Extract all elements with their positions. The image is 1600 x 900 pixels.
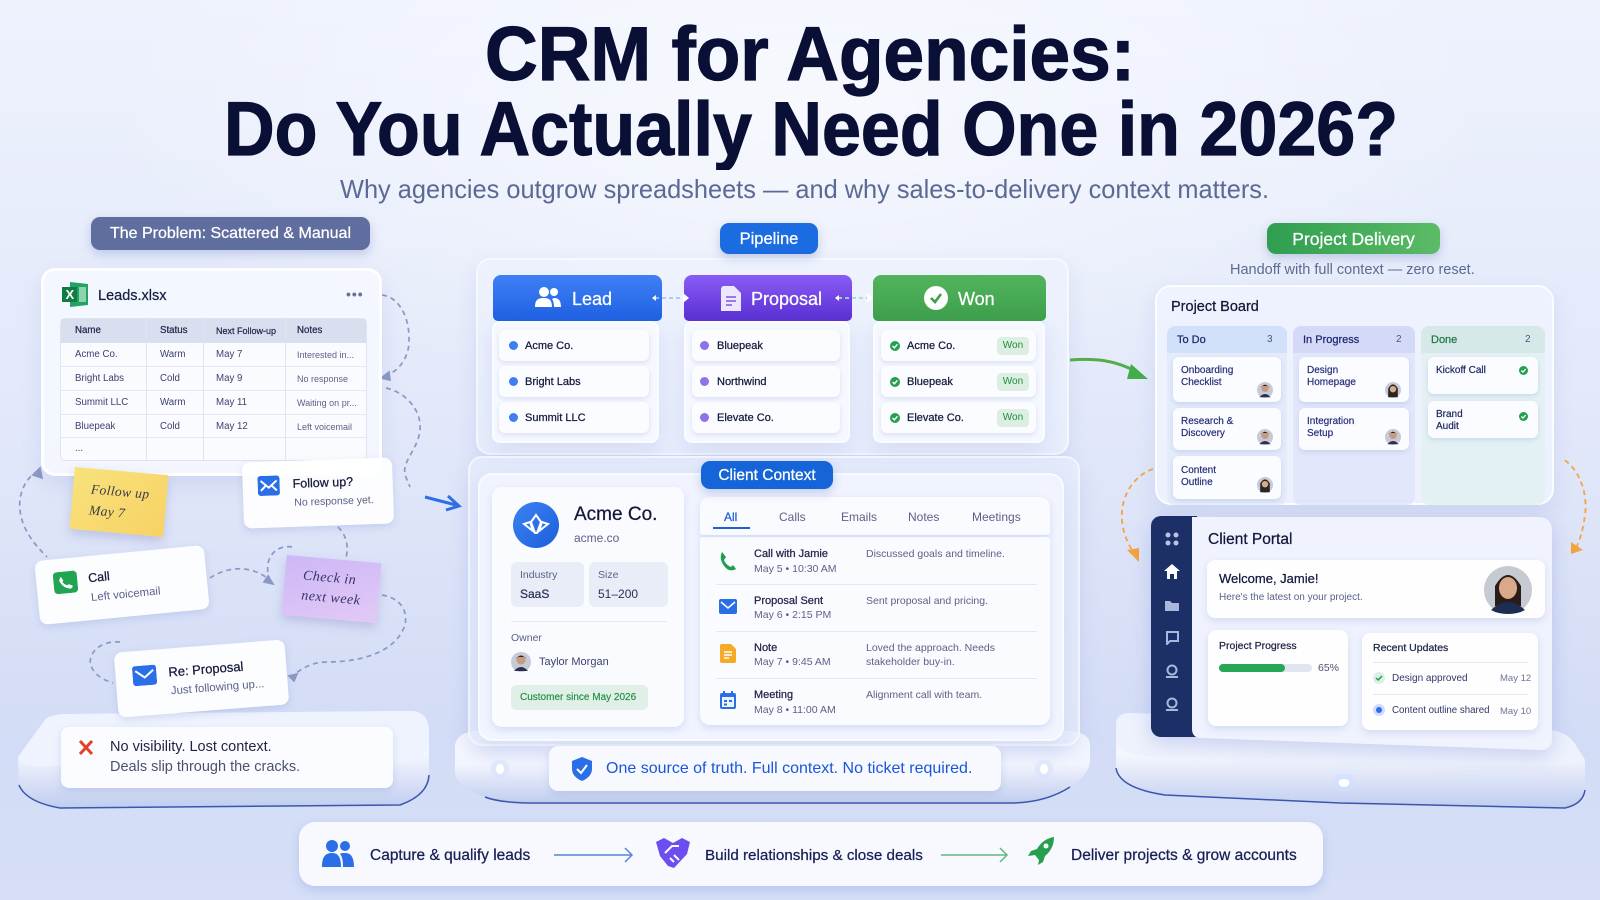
column: done bbox=[1421, 326, 1545, 505]
icon: note bbox=[720, 644, 736, 663]
card: integration: Integration bbox=[1307, 416, 1354, 427]
column: won: Won bbox=[1003, 376, 1023, 387]
leads table: ... bbox=[75, 443, 83, 454]
leads table bbox=[60, 318, 367, 461]
arrow: green bbox=[941, 848, 1008, 862]
badge: project delivery: Project Delivery bbox=[1292, 229, 1415, 249]
panel: project board bbox=[1155, 285, 1554, 505]
card: brand audit: Audit bbox=[1436, 421, 1459, 432]
header: in progress: In Progress bbox=[1303, 334, 1359, 346]
header: done: Done bbox=[1431, 334, 1457, 346]
activity timeline: Discussed goals and timeline. bbox=[866, 548, 1005, 560]
center platform base bbox=[455, 732, 1090, 804]
arrows: stage connectors bbox=[652, 293, 872, 303]
card: follow up email: Follow up? bbox=[292, 475, 353, 491]
header: lead bbox=[493, 275, 662, 321]
subtitle: Why agencies outgrow spreadsheets — and why sales-to-delivery context matters. bbox=[340, 174, 1269, 204]
welcome card: Here's the latest on your project. bbox=[1219, 592, 1363, 603]
column: won: Bluepeak bbox=[907, 376, 953, 388]
leads table: Cold bbox=[160, 373, 180, 384]
header: proposal bbox=[684, 275, 852, 321]
sticky note: follow up: May 7 bbox=[89, 502, 126, 521]
card: onboarding: Onboarding bbox=[1181, 365, 1233, 376]
card: design: Homepage bbox=[1307, 377, 1356, 388]
column: won: Elevate Co. bbox=[907, 412, 964, 424]
card: re proposal email bbox=[114, 639, 289, 718]
column: lead: Acme Co. bbox=[525, 340, 573, 352]
panel: project board: Project Board bbox=[1171, 299, 1259, 315]
icon: mail bbox=[132, 664, 157, 686]
arrow: scattered to crm bbox=[424, 495, 462, 512]
header: won bbox=[873, 275, 1046, 321]
activity timeline: Call with Jamie bbox=[754, 548, 828, 560]
icon: rocket bbox=[1028, 837, 1054, 865]
card: onboarding: Checklist bbox=[1181, 377, 1222, 388]
callout: no visibility: No visibility. Lost context. bbox=[110, 739, 272, 755]
card: kickoff: Kickoff Call bbox=[1436, 365, 1486, 376]
card: recent updates: May 10 bbox=[1500, 706, 1531, 717]
card: research: Research & bbox=[1181, 416, 1233, 427]
card: kickoff bbox=[1428, 357, 1538, 394]
header: to do: To Do bbox=[1177, 334, 1206, 346]
activity timeline: Alignment call with team. bbox=[866, 689, 982, 701]
badge: pipeline bbox=[720, 223, 818, 254]
fact: size bbox=[589, 562, 668, 607]
right platform base bbox=[1115, 713, 1586, 809]
icon: phone bbox=[52, 570, 78, 594]
badge: client context: Client Context bbox=[718, 467, 816, 484]
card: brand audit bbox=[1428, 401, 1538, 438]
badge: the problem: The Problem: Scattered & Manual bbox=[110, 225, 351, 242]
card: content bbox=[1173, 456, 1281, 499]
column: to do bbox=[1167, 326, 1287, 505]
lights on center platform bbox=[491, 760, 1053, 778]
column: lead: Summit LLC bbox=[525, 412, 586, 424]
column: proposal: Bluepeak bbox=[717, 340, 763, 352]
logo: acme bbox=[513, 502, 559, 548]
column: proposal bbox=[682, 275, 852, 454]
title bbox=[224, 12, 1398, 170]
leads table: Notes bbox=[297, 325, 322, 336]
tabs bbox=[700, 497, 1050, 535]
card: client profile: acme.co bbox=[574, 531, 619, 545]
sticky note: follow up bbox=[69, 467, 169, 537]
leads table: Bluepeak bbox=[75, 421, 115, 432]
activity timeline: May 6 • 2:15 PM bbox=[754, 609, 831, 621]
card: integration: Setup bbox=[1307, 428, 1333, 439]
leads table: Warm bbox=[160, 397, 185, 408]
fact: industry: SaaS bbox=[520, 587, 549, 601]
column: proposal: Elevate Co. bbox=[717, 412, 774, 424]
card: project progress: 65% bbox=[1318, 662, 1339, 674]
card: recent updates: Recent Updates bbox=[1373, 642, 1448, 654]
icon: document bbox=[721, 286, 741, 311]
callout: no visibility bbox=[61, 727, 393, 788]
column: won: Won bbox=[1003, 412, 1023, 423]
title: CRM for Agencies: bbox=[485, 12, 1135, 97]
card: content: Outline bbox=[1181, 477, 1213, 488]
main portal surface bbox=[1191, 516, 1560, 764]
fact: size: Size bbox=[598, 569, 618, 581]
activity timeline: May 8 • 11:00 AM bbox=[754, 704, 836, 716]
header: won: Won bbox=[958, 289, 995, 309]
fact: industry bbox=[511, 562, 584, 607]
file name: Leads.xlsx bbox=[98, 288, 167, 304]
card: recent updates: Content outline shared bbox=[1392, 705, 1489, 716]
card: re proposal email: Re: Proposal bbox=[168, 659, 244, 680]
card: research: Discovery bbox=[1181, 428, 1225, 439]
icon: call bbox=[720, 552, 736, 570]
header: in progress: 2 bbox=[1396, 334, 1402, 345]
card: call bbox=[34, 545, 210, 625]
leads table: May 7 bbox=[216, 349, 242, 360]
badge: pipeline: Pipeline bbox=[740, 230, 798, 248]
header: proposal: Proposal bbox=[751, 289, 822, 309]
activity timeline: Meeting bbox=[754, 689, 793, 701]
welcome card: Welcome, Jamie! bbox=[1219, 571, 1318, 586]
arrow: pipeline to delivery bbox=[1070, 358, 1148, 379]
tabs: All bbox=[724, 510, 737, 524]
leads table: Summit LLC bbox=[75, 397, 128, 408]
badge: client context bbox=[701, 461, 833, 489]
activity timeline: May 5 • 10:30 AM bbox=[754, 563, 836, 575]
card: follow up email: No response yet. bbox=[294, 494, 374, 509]
card: recent updates: Design approved bbox=[1392, 673, 1468, 684]
card: content: Content bbox=[1181, 465, 1216, 476]
icon: people bbox=[322, 840, 354, 867]
welcome card bbox=[1207, 560, 1545, 618]
tag: customer since: Customer since May 2026 bbox=[520, 692, 636, 703]
card: integration bbox=[1299, 408, 1409, 450]
card: design: Design bbox=[1307, 365, 1338, 376]
bottom flow bar: Deliver projects & grow accounts bbox=[1071, 847, 1297, 864]
icon: excel file bbox=[62, 282, 88, 307]
column: lead: Bright Labs bbox=[525, 376, 581, 388]
bottom flow bar: Build relationships & close deals bbox=[705, 847, 923, 864]
card: client profile: Taylor Morgan bbox=[539, 656, 609, 668]
leads table: Status bbox=[160, 325, 187, 336]
leads table: Acme Co. bbox=[75, 349, 118, 360]
card: call: Left voicemail bbox=[91, 585, 161, 604]
leads table: Bright Labs bbox=[75, 373, 124, 384]
card: client profile: Owner bbox=[511, 632, 542, 644]
menu dots: ••• bbox=[346, 286, 364, 302]
column: won bbox=[871, 275, 1047, 454]
leads table: Left voicemail bbox=[297, 422, 352, 432]
card: brand audit: Brand bbox=[1436, 409, 1463, 420]
panel: client context bbox=[468, 456, 1080, 746]
fact: industry: Industry bbox=[520, 569, 557, 581]
leads table: No response bbox=[297, 374, 348, 384]
card: recent updates bbox=[1362, 633, 1538, 730]
sticky note: check in bbox=[282, 555, 381, 623]
column: won: Won bbox=[1003, 340, 1023, 351]
tabs: Notes bbox=[908, 510, 939, 524]
column: lead bbox=[490, 275, 662, 454]
callout: no visibility: Deals slip through the cracks. bbox=[110, 759, 300, 775]
header: in progress bbox=[1293, 326, 1415, 353]
sticky note: check in: Check in bbox=[302, 568, 357, 588]
leads table: May 9 bbox=[216, 373, 242, 384]
arrows: board and portal sync bbox=[1120, 460, 1586, 562]
icon: shield bbox=[572, 757, 592, 781]
arrow: blue bbox=[554, 848, 633, 862]
card: onboarding bbox=[1173, 357, 1281, 402]
bottom flow bar: Capture & qualify leads bbox=[370, 847, 530, 864]
inner panel: client context bbox=[478, 473, 1064, 741]
card: client profile: Acme Co. bbox=[574, 504, 657, 525]
light on right platform bbox=[1338, 773, 1351, 787]
panel: pipeline bbox=[476, 258, 1069, 455]
activity timeline: Sent proposal and pricing. bbox=[866, 595, 988, 607]
card: client profile bbox=[492, 487, 684, 727]
icon: email bbox=[719, 599, 737, 614]
sidebar bbox=[1151, 516, 1197, 737]
icon: handshake bbox=[656, 838, 690, 868]
card: call: Call bbox=[88, 569, 110, 585]
card: design bbox=[1299, 357, 1409, 402]
tabs: Meetings bbox=[972, 510, 1021, 524]
badge: project delivery bbox=[1267, 223, 1440, 254]
tag: customer since bbox=[511, 685, 648, 710]
activity timeline bbox=[700, 537, 1050, 725]
leads table: Warm bbox=[160, 349, 185, 360]
header: to do bbox=[1167, 326, 1287, 353]
header: to do: 3 bbox=[1267, 334, 1273, 345]
tabs: Calls bbox=[779, 510, 806, 524]
icon: calendar bbox=[720, 691, 736, 709]
avatar: owner bbox=[511, 652, 531, 672]
leads table: Interested in... bbox=[297, 350, 354, 360]
tabs: Emails bbox=[841, 510, 877, 524]
callout: one source of truth: One source of truth. Full context. No ticket required. bbox=[606, 760, 972, 777]
leads table: Waiting on pr... bbox=[297, 398, 357, 408]
avatar: jamie bbox=[1484, 566, 1532, 614]
portal heading: Client Portal bbox=[1208, 531, 1292, 548]
card: re proposal email: Just following up... bbox=[170, 678, 265, 697]
card: project progress: Project Progress bbox=[1219, 640, 1297, 652]
leads table: May 12 bbox=[216, 421, 248, 432]
icon: red cross bbox=[79, 740, 93, 755]
badge: the problem bbox=[91, 217, 370, 250]
left platform base bbox=[18, 711, 430, 809]
header: done bbox=[1421, 326, 1545, 353]
panel: client portal bbox=[1142, 515, 1560, 764]
fact: size: 51–200 bbox=[598, 587, 638, 601]
leads table: May 11 bbox=[216, 397, 247, 408]
icon: check circle bbox=[924, 286, 948, 310]
panel: spreadsheet bbox=[41, 268, 382, 476]
column: proposal: Northwind bbox=[717, 376, 767, 388]
handoff caption: Handoff with full context — zero reset. bbox=[1230, 262, 1475, 278]
title: Do You Actually Need One in 2026? bbox=[224, 87, 1398, 170]
leads table: Next Follow-up bbox=[216, 326, 276, 336]
dashed connectors between scattered items bbox=[18, 294, 421, 684]
activity timeline: May 7 • 9:45 AM bbox=[754, 656, 831, 668]
activity timeline: Loved the approach. Needs bbox=[866, 642, 995, 654]
card: follow up email bbox=[242, 457, 394, 529]
card: project progress bbox=[1208, 630, 1348, 726]
card: research bbox=[1173, 408, 1281, 450]
leads table: Cold bbox=[160, 421, 180, 432]
icon: people bbox=[535, 287, 561, 307]
callout: one source of truth bbox=[549, 746, 1001, 791]
icon: email bbox=[258, 476, 280, 496]
icon: excel file: X bbox=[66, 287, 74, 302]
sticky note: follow up: Follow up bbox=[90, 482, 150, 502]
column: won: Acme Co. bbox=[907, 340, 955, 352]
leads table: Name bbox=[75, 325, 101, 336]
sticky note: check in: next week bbox=[301, 588, 361, 609]
column: in progress bbox=[1293, 326, 1415, 505]
activity timeline: Proposal Sent bbox=[754, 595, 823, 607]
activity timeline: Note bbox=[754, 642, 777, 654]
header: done: 2 bbox=[1525, 334, 1531, 345]
card: recent updates: May 12 bbox=[1500, 673, 1531, 684]
activity timeline: stakeholder buy-in. bbox=[866, 656, 955, 668]
bottom flow bar bbox=[299, 822, 1323, 886]
header: lead: Lead bbox=[572, 289, 612, 309]
